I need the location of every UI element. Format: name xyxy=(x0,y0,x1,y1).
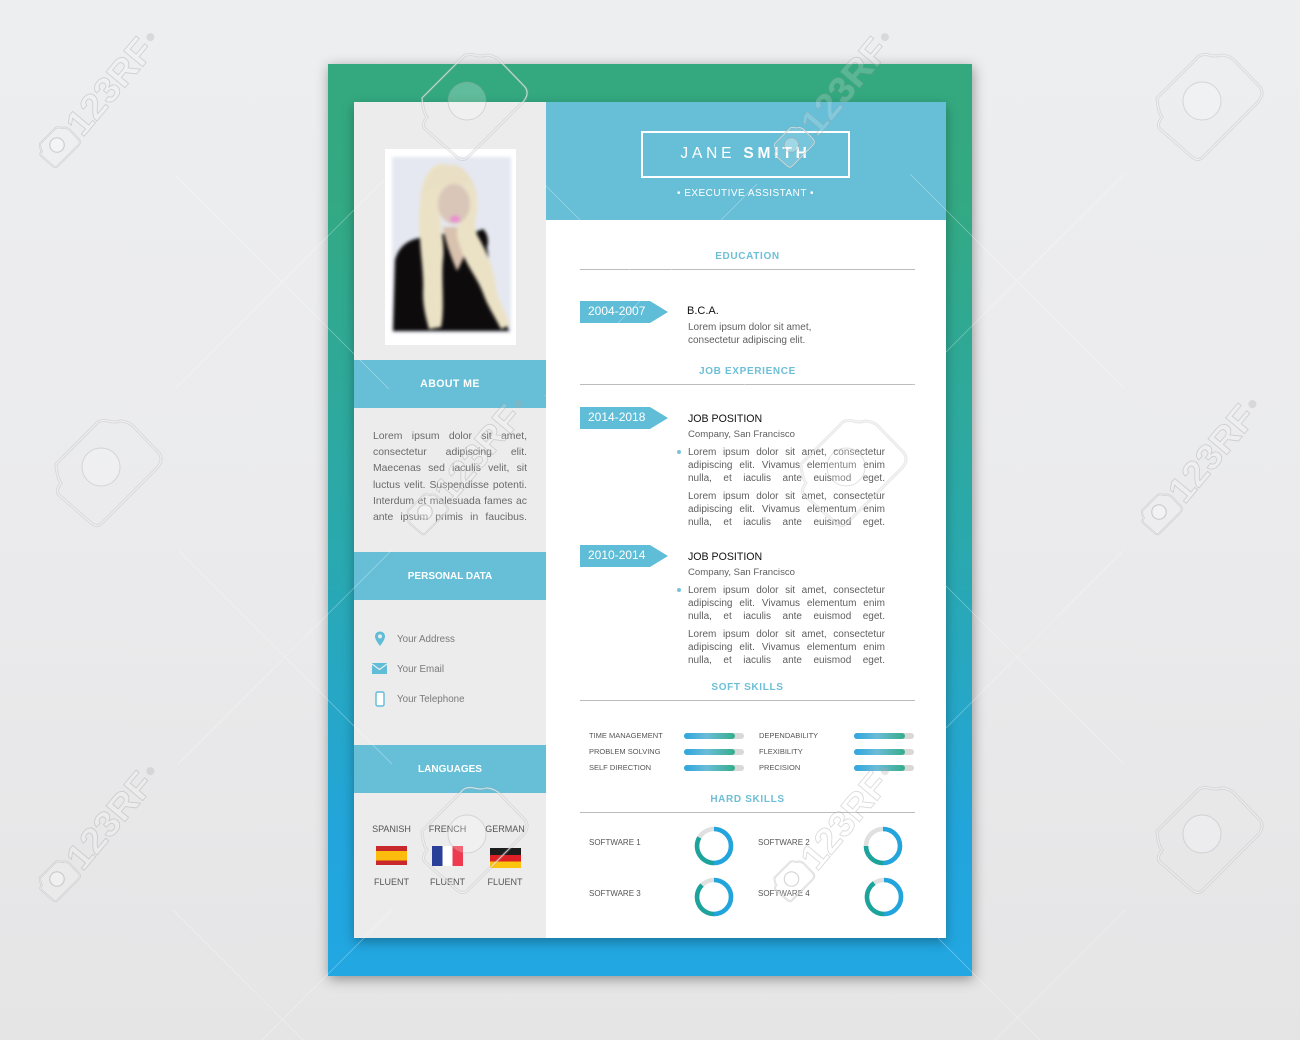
job entry 2: nulla, et iaculis ante euismod eget. xyxy=(688,611,885,622)
job entry 2: Lorem ipsum dolor sit amet, consectetur xyxy=(688,629,885,640)
hard skill: software 3 xyxy=(589,878,734,916)
language: spanish xyxy=(372,824,411,886)
label: email: Your Email xyxy=(397,664,444,674)
language: french: FLUENT xyxy=(430,876,465,886)
soft skill: time management xyxy=(589,731,744,740)
icon: location pin xyxy=(375,632,385,646)
panel: sidebar xyxy=(354,102,546,938)
language: german xyxy=(485,824,525,886)
bullet xyxy=(677,450,681,454)
job entry 2: nulla, et iaculis ante euismod eget. xyxy=(688,655,885,666)
header band xyxy=(546,102,946,220)
heading: languages: LANGUAGES xyxy=(418,764,482,775)
text block: about me: luctus velit. Suspendisse potenti. xyxy=(373,480,527,491)
text block: about me: ante ipsum primis in faucibus. xyxy=(373,512,527,523)
label: address: Your Address xyxy=(397,634,455,644)
inner panel shadow xyxy=(354,102,946,938)
icon: phone xyxy=(375,691,385,707)
heading: about me: ABOUT ME xyxy=(420,378,480,390)
job entry 1: adipiscing elit. Vivamus elementum enim xyxy=(688,504,885,515)
name box: JANE SMITH xyxy=(680,145,811,162)
donut chart 4 xyxy=(864,878,904,916)
soft skill: precision xyxy=(759,763,914,772)
language: german: FLUENT xyxy=(487,876,522,886)
job entry 1 xyxy=(677,412,885,528)
job entry 1: nulla, et iaculis ante euismod eget. xyxy=(688,517,885,528)
soft skill: self direction: SELF DIRECTION xyxy=(589,763,651,772)
icon: flag of France xyxy=(432,846,463,866)
hard skill: software 1: SOFTWARE 1 xyxy=(589,838,641,847)
donut chart 2 xyxy=(864,826,902,866)
language: german: GERMAN xyxy=(485,824,525,834)
date tag: 2010-2014 xyxy=(580,545,668,567)
date tag: 2010-2014: 2010-2014 xyxy=(588,548,645,562)
hard skill: software 4 xyxy=(758,878,904,916)
job entry 1: JOB POSITION xyxy=(688,412,762,424)
hard skill: software 4: SOFTWARE 4 xyxy=(758,889,810,898)
soft skill: problem solving: PROBLEM SOLVING xyxy=(589,747,661,756)
soft skill: flexibility: FLEXIBILITY xyxy=(759,747,803,756)
icon: envelope xyxy=(372,663,387,674)
job entry 2: JOB POSITION xyxy=(688,550,762,562)
watermark eggs xyxy=(56,54,1262,892)
soft skill: time management: TIME MANAGEMENT xyxy=(589,731,663,740)
contact list xyxy=(372,632,465,707)
text block: about me: Lorem ipsum dolor sit amet, xyxy=(373,431,527,442)
job entry 2: Lorem ipsum dolor sit amet, consectetur xyxy=(688,585,885,596)
education entry: consectetur adipiscing elit. xyxy=(688,334,805,346)
soft skill: flexibility xyxy=(759,747,914,756)
job entry 2 xyxy=(677,550,885,666)
heading: job experience: JOB EXPERIENCE xyxy=(699,366,796,377)
education entry xyxy=(687,305,811,346)
job entry 2: Company, San Francisco xyxy=(688,566,795,578)
language: french: FRENCH xyxy=(429,824,466,834)
job entry 1: Company, San Francisco xyxy=(688,428,795,440)
hard skill: software 2 xyxy=(758,826,902,866)
donut chart 3 xyxy=(694,878,734,916)
date tag: 2004-2007: 2004-2007 xyxy=(588,304,645,318)
job entry 1: nulla, et iaculis ante euismod eget. xyxy=(688,473,885,484)
job title: • EXECUTIVE ASSISTANT • xyxy=(677,188,814,199)
soft skill: dependability: DEPENDABILITY xyxy=(759,731,818,740)
diagonal guide lines xyxy=(173,174,1125,1040)
soft skill: self direction xyxy=(589,763,744,772)
job entry 1: Lorem ipsum dolor sit amet, consectetur xyxy=(688,447,885,458)
job entry 1: Lorem ipsum dolor sit amet, consectetur xyxy=(688,491,885,502)
label: telephone: Your Telephone xyxy=(397,694,465,704)
heading: soft skills: SOFT SKILLS xyxy=(711,682,784,693)
heading: hard skills xyxy=(580,791,915,813)
name box xyxy=(641,131,850,178)
education entry: Lorem ipsum dolor sit amet, xyxy=(688,322,811,332)
date tag: 2004-2007 xyxy=(580,301,668,323)
job entry 2: adipiscing elit. Vivamus elementum enim xyxy=(688,598,885,609)
heading: about me xyxy=(354,360,546,408)
hard skill: software 3: SOFTWARE 3 xyxy=(589,889,641,898)
panel: outer gradient card xyxy=(328,64,972,976)
language: spanish: FLUENT xyxy=(374,876,409,886)
hard skill: software 2: SOFTWARE 2 xyxy=(758,838,810,847)
heading: education: EDUCATION xyxy=(715,251,780,262)
job entry 1: adipiscing elit. Vivamus elementum enim xyxy=(688,460,885,471)
text block: about me xyxy=(373,431,527,523)
date tag: 2014-2018 xyxy=(580,407,668,429)
education entry: B.C.A. xyxy=(687,305,719,317)
soft skill: dependability xyxy=(759,731,914,740)
text block: about me: Interdum et malesuada fames ac xyxy=(373,496,527,507)
icon: flag of Germany xyxy=(490,848,521,868)
soft skill: problem solving xyxy=(589,747,744,756)
soft skill: precision: PRECISION xyxy=(759,763,800,772)
language: french xyxy=(429,824,466,886)
bullet xyxy=(677,588,681,592)
heading: languages xyxy=(354,745,546,793)
photo xyxy=(385,149,516,345)
date tag: 2014-2018: 2014-2018 xyxy=(588,410,645,424)
language: spanish: SPANISH xyxy=(372,824,411,834)
heading: job experience xyxy=(580,363,915,385)
hard skill: software 1 xyxy=(589,826,734,866)
panel: main content xyxy=(546,102,946,938)
heading: personal data: PERSONAL DATA xyxy=(408,571,492,582)
job entry 2: adipiscing elit. Vivamus elementum enim xyxy=(688,642,885,653)
heading: personal data xyxy=(354,552,546,600)
icon: flag of Spain xyxy=(376,846,407,865)
heading: soft skills xyxy=(580,679,915,701)
heading: hard skills: HARD SKILLS xyxy=(710,794,785,805)
text block: about me: consectetur adipiscing elit. xyxy=(373,447,527,458)
heading: education xyxy=(580,248,915,270)
donut chart 1 xyxy=(694,826,734,866)
